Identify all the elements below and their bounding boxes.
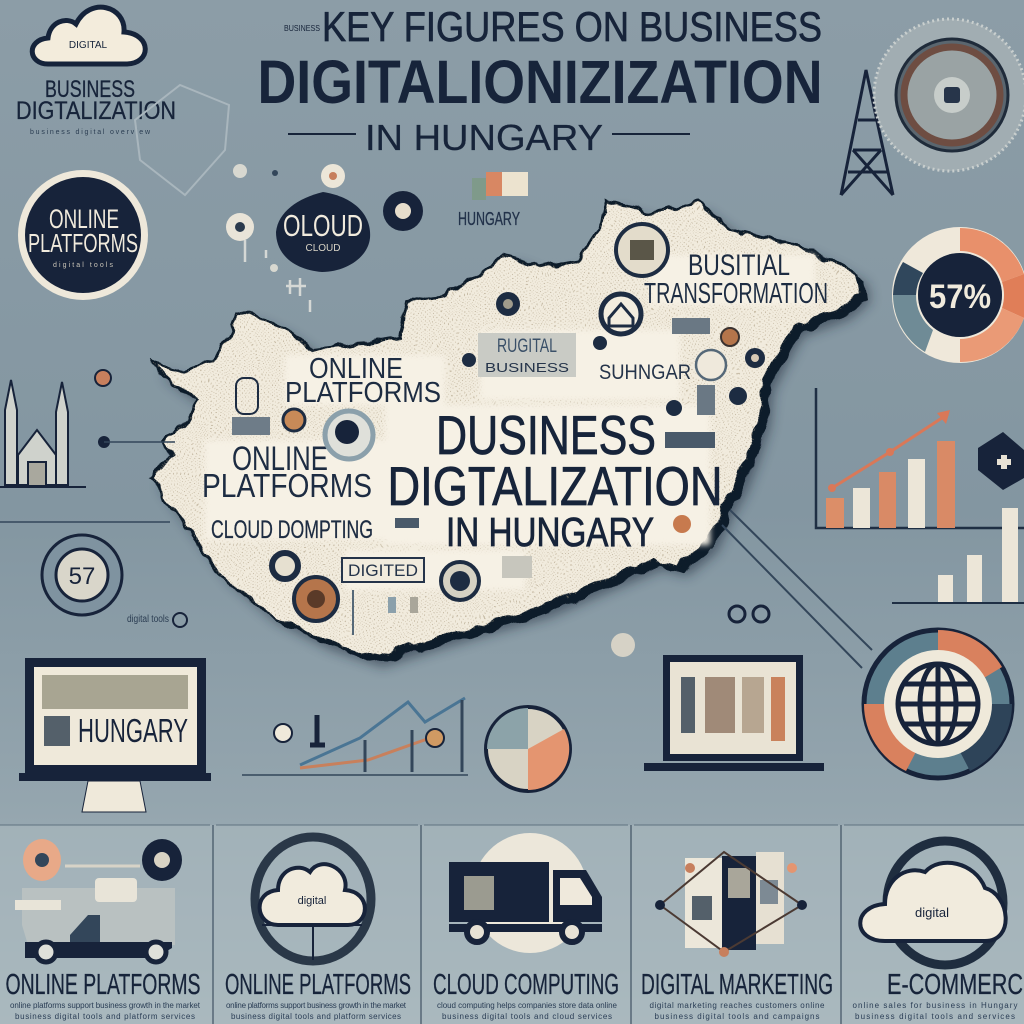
map text: cloud computing: CLOUD DOMPTING [211, 516, 373, 544]
panel: digital marketing [641, 852, 833, 1021]
title: BUSINESS [284, 24, 320, 33]
panel: online platforms 1: ONLINE PLATFORMS [6, 969, 200, 1001]
map text: online platforms upper: ONLINE [309, 353, 403, 385]
panel: online platforms 1: online platforms support business growth in the market [10, 1001, 201, 1010]
map text: small labels: SUHNGAR [599, 361, 691, 384]
title: IN HUNGARY [365, 117, 603, 158]
flag: Hungary label [458, 172, 528, 229]
donut chart 57%: 57% [929, 278, 991, 316]
small pin icons [226, 164, 423, 312]
panel: online platforms 1 [6, 839, 201, 1021]
title: KEY FIGURES ON BUSINESS [322, 3, 822, 50]
bottom band lighter background [0, 825, 1024, 1024]
plus hexagon icon [978, 432, 1024, 490]
map icons [232, 224, 765, 635]
badge 57% small: 57 [69, 563, 95, 590]
map text: transformation [644, 249, 828, 310]
cloud badge: business digitalization: DIGTALIZATION [16, 97, 176, 125]
monitor: Hungary [19, 658, 211, 812]
badge: online platforms: digital tools [53, 262, 114, 269]
cloud badge: business digitalization: business digital overview [30, 129, 151, 136]
map text: online platforms lower: ONLINE [232, 440, 328, 478]
cloud badge: business digitalization [16, 7, 176, 136]
map text: main heading: IN HUNGARY [446, 509, 654, 555]
cloud badge: business digitalization: BUSINESS [45, 76, 135, 103]
small connector dots [0, 370, 175, 522]
cloud pin: CLOUD [305, 243, 341, 254]
badge: online platforms: ONLINE [49, 204, 119, 234]
panel: online platforms 2: ONLINE PLATFORMS [225, 969, 411, 1001]
cloud badge: business digitalization: DIGITAL [69, 40, 108, 51]
laptop [644, 655, 824, 771]
panel: digital marketing: business digital tools and campaigns [654, 1012, 820, 1021]
badge 57% small [42, 535, 122, 615]
caption below small badge [127, 613, 187, 627]
monitor: Hungary: HUNGARY [78, 712, 188, 749]
radio tower icon [841, 70, 893, 195]
map text: transformation: TRANSFORMATION [644, 278, 828, 310]
panel: e-commerce [852, 841, 1023, 1021]
map text: online platforms lower: PLATFORMS [202, 467, 372, 504]
map text: online platforms upper: PLATFORMS [285, 377, 441, 409]
globe wheel [864, 630, 1012, 778]
panel: e-commerce: business digital tools and services [855, 1012, 1015, 1021]
map text: online platforms lower [202, 440, 372, 504]
panel: digital marketing: digital marketing reaches customers online [650, 1001, 825, 1010]
map text: small labels: RUGITAL [497, 336, 557, 357]
map of Hungary [150, 200, 860, 658]
badge: online platforms [18, 170, 148, 300]
panel: cloud computing [433, 833, 619, 1021]
line chart center [242, 698, 468, 775]
flag: Hungary label: HUNGARY [458, 209, 520, 229]
donut chart 57% [893, 228, 1024, 362]
gear dial [874, 19, 1024, 171]
map text: small labels [342, 333, 691, 582]
church towers icon [0, 380, 86, 487]
panel: online platforms 2 [225, 837, 411, 1021]
panel: cloud computing: cloud computing helps companies store data online [437, 1001, 618, 1010]
panel: digital marketing: DIGITAL MARKETING [641, 969, 833, 1001]
faint shield outline [135, 85, 229, 195]
panel: online platforms 2: online platforms support business growth in the market [226, 1001, 407, 1010]
pie chart [486, 707, 570, 791]
bar chart small [892, 508, 1024, 603]
caption below small badge: digital tools [127, 614, 169, 625]
panel: online platforms 2: business digital tools and platform services [231, 1012, 401, 1021]
map text: main heading: DUSINESS [436, 404, 656, 466]
badge: online platforms: PLATFORMS [28, 228, 138, 258]
cloud pin [276, 192, 370, 272]
map text: small labels: DIGITED [348, 561, 418, 580]
small dots and connectors [611, 606, 769, 657]
map shadow [157, 206, 870, 667]
map text: main heading [388, 404, 722, 555]
panel: online platforms 1: business digital tools and platform services [15, 1012, 195, 1021]
title: DIGITALIONIZIZATION [258, 48, 822, 116]
panel: online platforms 2: digital [298, 895, 326, 907]
connector lines to globe [722, 510, 872, 668]
bar chart with trend arrow [816, 388, 1024, 528]
panel: cloud computing: CLOUD COMPUTING [433, 969, 619, 1001]
cloud pin: OLOUD [283, 208, 363, 243]
title [258, 3, 822, 158]
map text: online platforms upper [285, 353, 441, 409]
panel: cloud computing: business digital tools and cloud services [442, 1012, 612, 1021]
map text: main heading: DIGTALIZATION [388, 455, 722, 517]
panel: e-commerce: digital [915, 905, 949, 920]
map text: transformation: BUSITIAL [688, 249, 790, 282]
panel: e-commerce: online sales for business in Hungary [852, 1001, 1018, 1010]
map text: small labels: BUSINESS [485, 360, 569, 375]
